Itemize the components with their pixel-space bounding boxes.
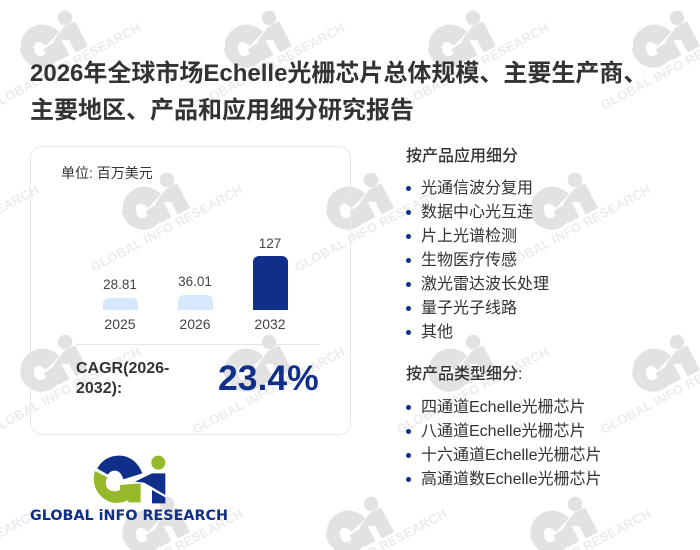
list: product types: 四通道Echelle光栅芯片 [421,399,585,416]
title: 主要地区、产品和应用细分研究报告 [30,97,414,124]
list: applications: 激光雷达波长处理 [421,276,549,293]
year 2032: 2032 [254,316,286,332]
panel: market size chart card [30,146,351,435]
bar 2025 [103,298,138,310]
heading: by product type: 按产品类型细分: [406,366,522,383]
list: applications: 生物医疗传感 [421,252,517,269]
watermark pattern: GLOBAL INFO RESEARCH [190,344,347,437]
heading: by application: 按产品应用细分 [406,148,518,165]
value 2032: 127 [259,236,281,251]
year 2026: 2026 [179,316,211,332]
watermark pattern: GLOBAL INFO RESEARCH [394,344,551,437]
logo: Global Info Research: GLOBAL iNFO RESEARCH [30,508,228,524]
bar 2026 [178,295,213,310]
list: applications: 数据中心光互连 [421,204,533,221]
value 2026: 36.01 [178,274,212,289]
watermark pattern: GLOBAL INFO RESEARCH [88,182,245,275]
CAGR label: 2032): [76,380,122,396]
list: applications: 量子光子线路 [421,300,517,317]
unit label: 单位: 百万美元 [61,165,153,181]
list: product types: 高通道数Echelle光栅芯片 [421,471,601,488]
logo: Global Info Research [30,456,228,524]
bar 2032 [253,256,288,310]
title [30,60,647,124]
list: product types [406,398,601,488]
list: applications: 其他 [421,324,453,341]
watermark pattern: GLOBAL INFO RESEARCH [394,20,551,113]
year 2025: 2025 [104,316,136,332]
watermark pattern: GLOBAL INFO RESEARCH [190,20,347,113]
title: 2026年全球市场Echelle光栅芯片总体规模、主要生产商、 [30,60,647,87]
list: applications: 光通信波分复用 [421,180,533,197]
list: applications [406,179,549,341]
CAGR label [76,360,169,396]
CAGR value: 23.4% [218,358,319,398]
watermark pattern: GLOBAL INFO RESEARCH [292,182,449,275]
list: product types: 八通道Echelle光栅芯片 [421,423,585,440]
CAGR label: CAGR(2026- [76,360,169,377]
watermark pattern: GLOBAL INFO RESEARCH [496,182,653,275]
value 2025: 28.81 [103,277,137,292]
list: product types: 十六通道Echelle光栅芯片 [421,447,601,464]
list: applications: 片上光谱检测 [421,228,517,245]
